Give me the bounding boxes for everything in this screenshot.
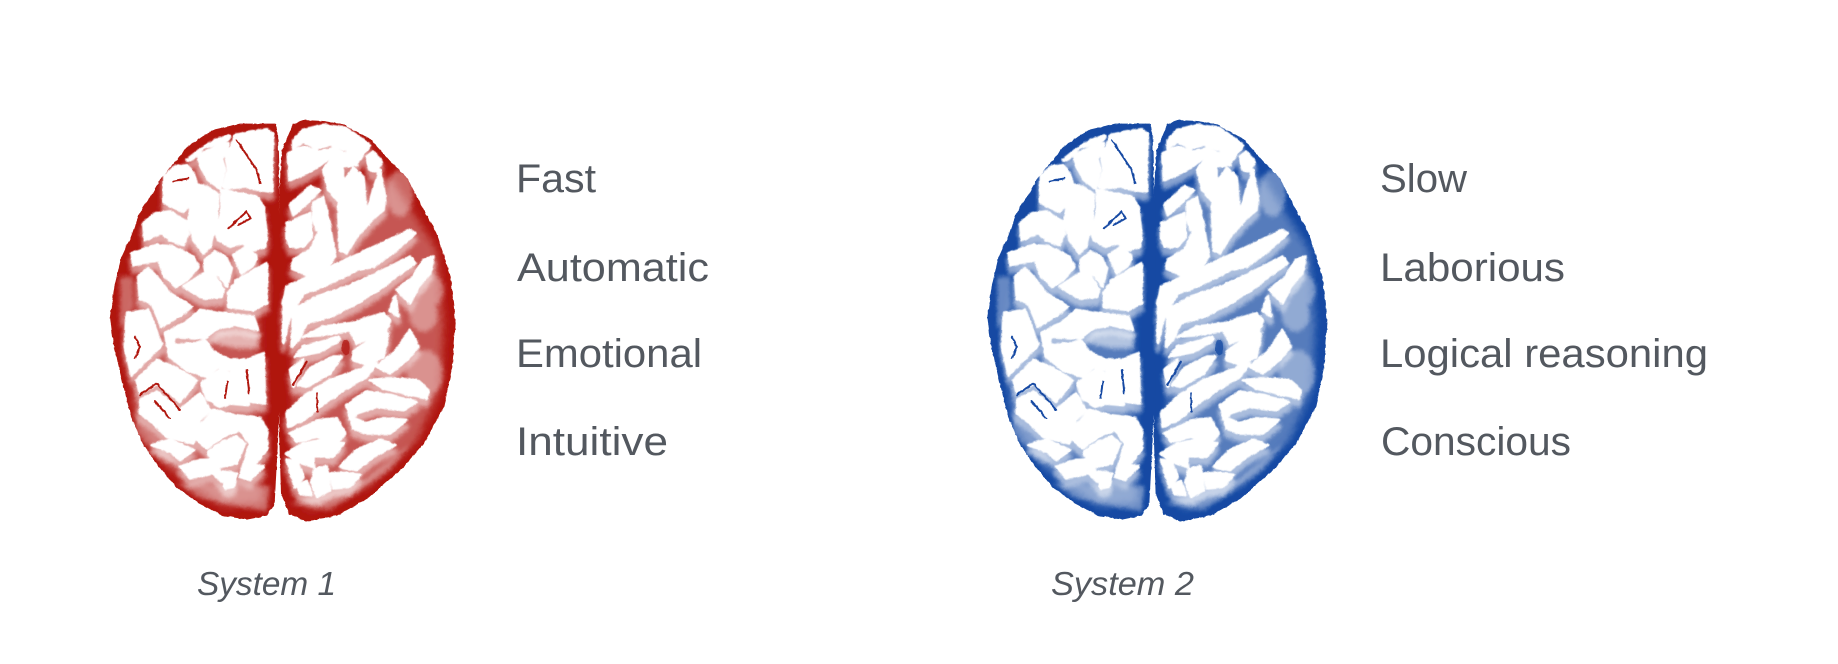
trait: Emotional: Emotional <box>516 332 702 376</box>
trait: Logical reasoning: Logical reasoning <box>1380 332 1708 376</box>
icon: red brain, System 1 <box>111 121 455 521</box>
trait: Laborious: Laborious <box>1380 246 1565 290</box>
list: System 2 traits <box>1380 157 1708 464</box>
caption: System 1: System 1 <box>197 565 336 602</box>
trait: Intuitive: Intuitive <box>516 420 668 464</box>
trait: Fast: Fast <box>516 157 596 201</box>
icon: blue brain, System 2 <box>988 121 1327 521</box>
caption: System 2: System 2 <box>1051 565 1194 602</box>
trait: Automatic: Automatic <box>517 246 709 290</box>
list: System 1 traits <box>516 157 709 464</box>
trait: Conscious: Conscious <box>1381 420 1571 464</box>
trait: Slow: Slow <box>1380 157 1467 201</box>
